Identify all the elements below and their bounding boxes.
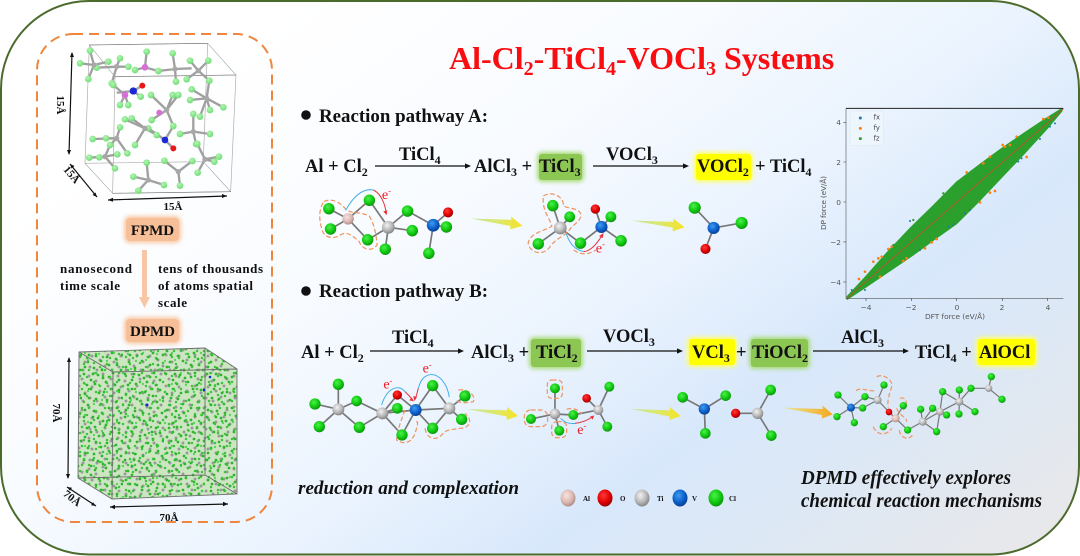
arrow FPMD to DPMD bbox=[139, 250, 150, 308]
chart tick labels bbox=[830, 118, 1051, 312]
molecule: TiCl3-O-TiCl2 bbox=[524, 380, 614, 438]
electron transfer arrows B1 bbox=[382, 359, 449, 405]
equation: pathway B: 4 bbox=[428, 336, 434, 350]
equation: pathway A: 3 bbox=[652, 153, 658, 167]
scale text right: of atoms spatial bbox=[158, 278, 253, 293]
electron transfer arrow 2 bbox=[566, 233, 605, 256]
chart tick labels: −4 bbox=[830, 278, 841, 287]
atom legend: V bbox=[692, 495, 697, 503]
equation: pathway A: 4 bbox=[435, 153, 441, 167]
heading: pathway A: Reaction pathway A: bbox=[319, 106, 488, 127]
equation: pathway B: 3 bbox=[724, 351, 730, 365]
DPMD box bbox=[124, 317, 181, 344]
legend: fz bbox=[874, 134, 880, 142]
equation: pathway A: AlCl bbox=[474, 157, 511, 177]
molecule: VCl3 bbox=[677, 390, 731, 439]
large cube labels bbox=[50, 404, 179, 524]
molecule: AlOCl chain complex bbox=[833, 373, 1006, 438]
transition arrow B3 bbox=[782, 406, 833, 419]
molecule: TiCl3-VOCl3 bbox=[528, 194, 627, 253]
large cube labels: 70Å bbox=[160, 512, 179, 524]
equation: pathway B bbox=[301, 327, 1037, 369]
large cube dimension arrows bbox=[66, 357, 228, 509]
equation: pathway B: AlCl bbox=[471, 343, 508, 363]
equation: pathway B: 4 bbox=[951, 351, 957, 365]
electron transfer arrow B2 bbox=[561, 415, 594, 438]
equation: pathway B: AlOCl bbox=[979, 343, 1030, 363]
chart tick labels: −4 bbox=[861, 303, 872, 312]
scatter band bbox=[846, 109, 1063, 299]
reaction arrows bbox=[375, 163, 689, 169]
scale text right: tens of thousands bbox=[158, 261, 263, 276]
title: Al-Cl bbox=[449, 40, 524, 76]
conclusion text bbox=[800, 468, 1042, 512]
equation: pathway B: TiCl bbox=[536, 343, 572, 363]
equation: pathway B: + bbox=[957, 343, 972, 363]
electron transfer arrow 1: e bbox=[382, 187, 388, 203]
small FPMD cube bbox=[77, 43, 236, 194]
chart tick labels: 4 bbox=[836, 118, 841, 127]
equation: pathway A: + bbox=[517, 157, 532, 177]
atom legend: O bbox=[620, 495, 626, 503]
electron transfer arrow 2: e bbox=[596, 240, 602, 256]
electron transfer arrow B2: e bbox=[577, 423, 584, 438]
highlight: TiOCl2 bbox=[749, 337, 810, 369]
heading: pathway B: Reaction pathway B: bbox=[319, 281, 488, 302]
large cube labels: 70Å bbox=[50, 404, 62, 423]
title: Systems bbox=[716, 40, 834, 76]
electron transfer arrows B1: e bbox=[383, 378, 390, 393]
equation: pathway A: 2 bbox=[362, 165, 368, 179]
equation: pathway B: AlCl bbox=[841, 328, 878, 348]
equation: pathway A: TiCl bbox=[539, 157, 575, 177]
highlight: TiCl2 bbox=[529, 337, 583, 369]
equation: pathway A: TiCl bbox=[399, 145, 435, 165]
axes and ticks bbox=[843, 108, 1063, 301]
equation: pathway B: VCl bbox=[692, 343, 724, 363]
equation: pathway A: 3 bbox=[575, 165, 581, 179]
electron transfer arrows B1: - bbox=[390, 375, 393, 385]
x axis label: DFT force (eV/Å) bbox=[925, 312, 985, 321]
FPMD box bbox=[124, 216, 181, 243]
reaction arrows bbox=[370, 348, 909, 354]
dashed panel border bbox=[37, 34, 272, 522]
equation: pathway A bbox=[305, 145, 811, 182]
transition arrow A2 bbox=[632, 219, 685, 231]
parity plot: DP force vs DFT force bbox=[843, 108, 1063, 301]
highlight: TiCl3 bbox=[537, 152, 584, 182]
conclusion text: DPMD effectively explores bbox=[800, 468, 1011, 489]
equation: pathway B: 3 bbox=[649, 335, 655, 349]
atom legend: Ti bbox=[657, 495, 664, 503]
caption: reduction and complexation: reduction and complexation bbox=[298, 478, 519, 499]
large DPMD cube bbox=[78, 348, 237, 499]
small cube labels: 15Å bbox=[54, 96, 66, 115]
chart tick labels: −2 bbox=[830, 238, 841, 247]
highlight: VOCl2 bbox=[694, 152, 753, 182]
scale text left: nanosecond bbox=[60, 261, 133, 276]
atom legend bbox=[560, 490, 736, 506]
highlight: AlOCl bbox=[976, 337, 1037, 367]
chart tick labels: 0 bbox=[955, 303, 960, 312]
molecule: TiOCl2 bbox=[731, 385, 777, 441]
large cube labels: 70Å bbox=[61, 488, 83, 509]
small cube dimension arrows bbox=[67, 52, 227, 202]
title: 3 bbox=[706, 58, 716, 80]
atom legend: Cl bbox=[729, 495, 736, 503]
equation: pathway B: 2 bbox=[572, 351, 578, 365]
equation: pathway A: 3 bbox=[511, 165, 517, 179]
atom legend: Al bbox=[583, 495, 590, 503]
scale text right: scale bbox=[158, 295, 187, 310]
molecule: VOCl2 bbox=[689, 202, 748, 254]
molecules: pathway B, left bbox=[309, 359, 681, 443]
equation: pathway B: TiCl bbox=[915, 343, 951, 363]
legend: fx bbox=[874, 114, 880, 122]
molecule: AlCl3-TiCl4-VOCl3 complex bbox=[320, 195, 453, 259]
title: -TiCl bbox=[534, 40, 606, 76]
chart tick labels: 4 bbox=[1046, 303, 1051, 312]
electron transfer arrows B1: e bbox=[423, 362, 429, 377]
scale text right bbox=[158, 261, 263, 310]
equation: pathway A: VOCl bbox=[697, 157, 743, 177]
equation: pathway B: 3 bbox=[508, 351, 514, 365]
equation: pathway B: VOCl bbox=[603, 327, 649, 347]
chart tick labels: 2 bbox=[1000, 303, 1004, 312]
molecules: pathway B, right bbox=[677, 373, 1006, 441]
highlight: VCl3 bbox=[687, 337, 737, 367]
equation: pathway B: 3 bbox=[878, 336, 884, 350]
molecules: pathway A bbox=[320, 186, 748, 259]
conclusion text: chemical reaction mechanisms bbox=[801, 491, 1042, 512]
electron transfer arrow 1: - bbox=[388, 186, 391, 196]
title: -VOCl bbox=[616, 40, 706, 76]
electron transfer arrow B2: - bbox=[584, 421, 587, 431]
title: 4 bbox=[606, 58, 616, 80]
transition arrow A1 bbox=[471, 216, 522, 229]
molecule: binuclear complex bbox=[309, 379, 474, 443]
panel: simulation scales bbox=[37, 34, 272, 524]
equation: pathway A: + TiCl bbox=[755, 157, 805, 177]
equation: pathway A: VOCl bbox=[606, 145, 652, 165]
legend bbox=[850, 111, 883, 146]
title: 2 bbox=[524, 58, 534, 80]
chart tick labels: 0 bbox=[836, 198, 841, 207]
equation: pathway B: 2 bbox=[358, 351, 364, 365]
transition arrow B2 bbox=[630, 407, 681, 420]
y axis label: DP force (eV/Å) bbox=[819, 176, 828, 230]
chart tick labels: −2 bbox=[906, 303, 916, 312]
scale text left bbox=[60, 261, 133, 293]
equation: pathway B: TiCl bbox=[392, 328, 428, 348]
equation: pathway A: 2 bbox=[743, 165, 749, 179]
electron transfer arrow 1 bbox=[346, 186, 391, 215]
DPMD box: DPMD bbox=[130, 324, 175, 340]
legend: fy bbox=[874, 124, 880, 132]
electron transfer arrow 2: - bbox=[602, 239, 605, 249]
electron transfer arrows B1: - bbox=[429, 359, 432, 369]
small cube labels: 15Å bbox=[61, 164, 82, 186]
equation: pathway A: 4 bbox=[805, 165, 811, 179]
transition arrow B1 bbox=[467, 407, 518, 420]
scale text left: time scale bbox=[60, 278, 120, 293]
FPMD box: FPMD bbox=[131, 223, 174, 239]
small cube labels bbox=[54, 96, 183, 213]
chart tick labels: 2 bbox=[836, 158, 841, 167]
equation: pathway B: + bbox=[736, 343, 747, 363]
equation: pathway B: Al + Cl bbox=[301, 343, 358, 363]
equation: pathway B: 2 bbox=[802, 351, 808, 365]
small cube labels: 15Å bbox=[164, 201, 183, 213]
equation: pathway B: TiOCl bbox=[752, 343, 802, 363]
equation: pathway A: Al + Cl bbox=[305, 157, 362, 177]
equation: pathway B: + bbox=[514, 343, 529, 363]
